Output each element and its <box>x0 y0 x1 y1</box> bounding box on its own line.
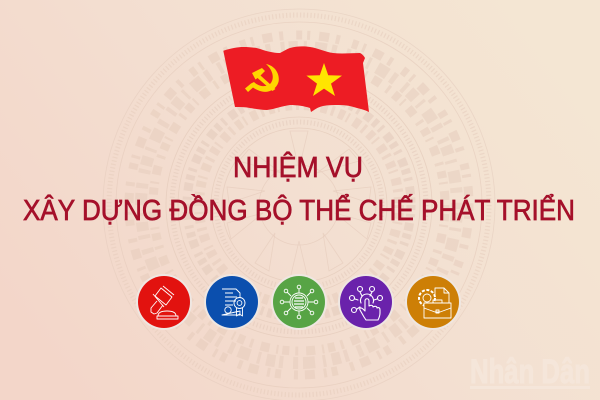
flag cloth <box>223 46 369 112</box>
icon: circuit chip <box>271 274 327 330</box>
icon: gavel <box>136 274 192 330</box>
icon: touch network <box>338 274 394 330</box>
icon: certificate document <box>204 274 260 330</box>
central star rays <box>227 131 371 279</box>
bronze drum watermark pattern <box>103 9 495 400</box>
title line 1: NHIỆM VỤ <box>233 151 363 184</box>
icon: briefcase with gear and file <box>405 274 461 330</box>
star <box>306 63 342 96</box>
hammer and sickle <box>245 64 279 92</box>
flag <box>223 46 369 112</box>
title <box>23 151 575 227</box>
